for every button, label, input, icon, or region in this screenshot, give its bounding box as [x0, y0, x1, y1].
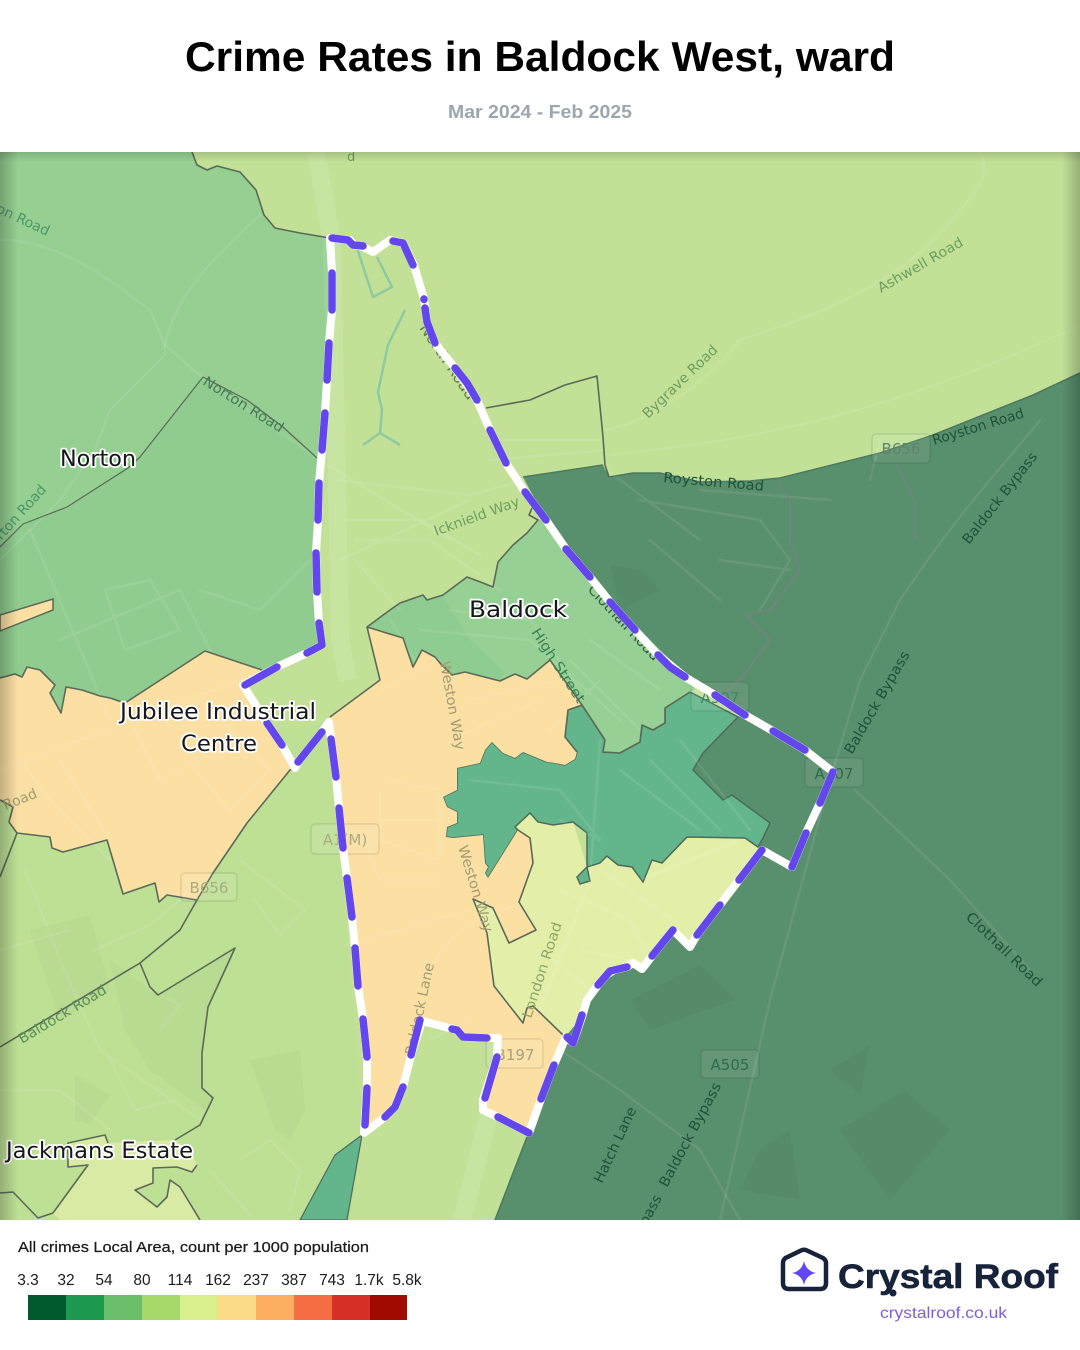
- shield: A507 north: A507: [701, 689, 739, 707]
- legend tick values: 80: [133, 1272, 151, 1289]
- map area: lower left green: [0, 722, 363, 1220]
- ward boundary: Baldock West: [243, 238, 833, 1133]
- road labels: Weston Way: [454, 843, 496, 934]
- shield: B656 east: B656: [882, 440, 920, 458]
- map area: central orange: [329, 627, 582, 1133]
- legend title: All crimes Local Area, count per 1000 population: [18, 1239, 369, 1256]
- map area: pale south west estate: [53, 1135, 200, 1220]
- shield: B656 east: [872, 434, 930, 463]
- legend tick values: 32: [57, 1272, 75, 1289]
- shield: B656 west: [181, 873, 237, 901]
- road labels: [0, 150, 1045, 1244]
- legend tick values: 237: [243, 1272, 269, 1289]
- legend tick values: 114: [168, 1272, 193, 1289]
- map area: faint field patches: [30, 565, 950, 1200]
- map area: medium green centre: [443, 692, 770, 884]
- logo: Crystal Roof: [783, 1250, 1059, 1322]
- place labels: [4, 447, 567, 1164]
- road labels: Baldock Lane: [403, 962, 438, 1057]
- legend tick values: 743: [319, 1272, 345, 1289]
- map area: pale yellow south east: [473, 813, 762, 1037]
- place: Jubilee Industrial Centre: Jubilee Industrial: [118, 700, 316, 725]
- map area: green wedge south: [300, 1135, 362, 1220]
- road labels: Norton Road: [200, 374, 286, 436]
- wordmark y keyhole dot: [890, 1290, 896, 1296]
- road labels: London Road: [520, 920, 566, 1020]
- legend: [17, 1239, 422, 1320]
- legend tick values: 387: [281, 1272, 307, 1289]
- shield: A507 east: [805, 758, 863, 787]
- shield: B197: [486, 1039, 543, 1068]
- legend tick values: 162: [205, 1272, 231, 1289]
- map area: small orange sliver: [0, 599, 53, 631]
- road labels: Royston Road: [930, 406, 1026, 449]
- road labels: Weston Way: [436, 660, 467, 751]
- place: Norton: Norton: [60, 447, 136, 472]
- shield: B656 west: B656: [190, 879, 228, 897]
- river in ward: [357, 248, 405, 445]
- website url: crystalroof.co.uk: [880, 1305, 1008, 1322]
- map edge vignette: [0, 152, 1080, 1220]
- shield: A505: A505: [711, 1056, 749, 1074]
- shield: A507 east: A507: [815, 765, 853, 783]
- map area: Jubilee Industrial orange: [0, 651, 295, 902]
- legend tick values: 3.3: [17, 1272, 39, 1289]
- road labels: d: [347, 150, 355, 165]
- icon: house with star: [783, 1250, 826, 1289]
- legend tick values: 1.7k: [354, 1272, 384, 1289]
- shield: B197: B197: [496, 1046, 534, 1064]
- place: Jackmans Estate: Jackmans Estate: [4, 1139, 193, 1164]
- shield: A1(M): [311, 824, 379, 854]
- map area: north west green: [0, 152, 328, 546]
- road labels: Bygrave Road: [640, 342, 721, 422]
- roads: faint street network: [0, 152, 1040, 1220]
- road labels: Ashwell Road: [875, 235, 966, 296]
- place: Jubilee Industrial Centre: Centre: [181, 732, 257, 757]
- road: A1(M) corridor: [316, 152, 490, 1220]
- legend tick values: 5.8k: [392, 1272, 422, 1289]
- place: Baldock: Baldock: [469, 598, 567, 623]
- subtitle: date range: Mar 2024 - Feb 2025: [448, 102, 632, 122]
- shield: A507 north: [691, 682, 749, 711]
- road labels: Baldock Road: [16, 982, 110, 1047]
- map area: Norton lower green: [0, 377, 322, 710]
- map area: Baldock west darker green: [367, 595, 505, 681]
- shield: A505: [701, 1050, 759, 1078]
- map area: Baldock light green: [444, 520, 695, 752]
- road labels: Clothall Road: [962, 909, 1045, 990]
- ward outline: white: [243, 238, 833, 1133]
- road labels: Icknield Way: [432, 494, 522, 540]
- road labels: Baldock Bypass: [960, 449, 1041, 547]
- road labels: North Road: [416, 321, 478, 403]
- wordmark: Crystal Roof: [838, 1258, 1059, 1296]
- legend tick values: 54: [95, 1272, 113, 1289]
- map area: dark green east: [495, 373, 1080, 1220]
- road labels: Baldock Bypass: [656, 1080, 725, 1190]
- legend tick values: [17, 1272, 422, 1289]
- road labels: Hatch Lane: [591, 1105, 640, 1186]
- lane lines in dark area: [715, 465, 915, 700]
- map area: base light green: [0, 152, 1080, 1220]
- shield: A1(M): A1(M): [323, 831, 367, 849]
- road labels: Clothall Road: [584, 582, 663, 664]
- road labels: Royston Road: [663, 470, 765, 495]
- road labels: Bypass: [628, 1192, 666, 1244]
- sub-area boundary lines: [0, 152, 1080, 1220]
- title: Crime Rates in Baldock West, ward: [185, 33, 895, 80]
- ward outline: purple dashes: [245, 238, 833, 1133]
- legend colour scale: [28, 1295, 407, 1320]
- road labels: High Street: [528, 625, 588, 707]
- road labels: Baldock Bypass: [842, 649, 913, 757]
- place: Jubilee Industrial Centre: [118, 700, 316, 757]
- road shields: [181, 434, 930, 1078]
